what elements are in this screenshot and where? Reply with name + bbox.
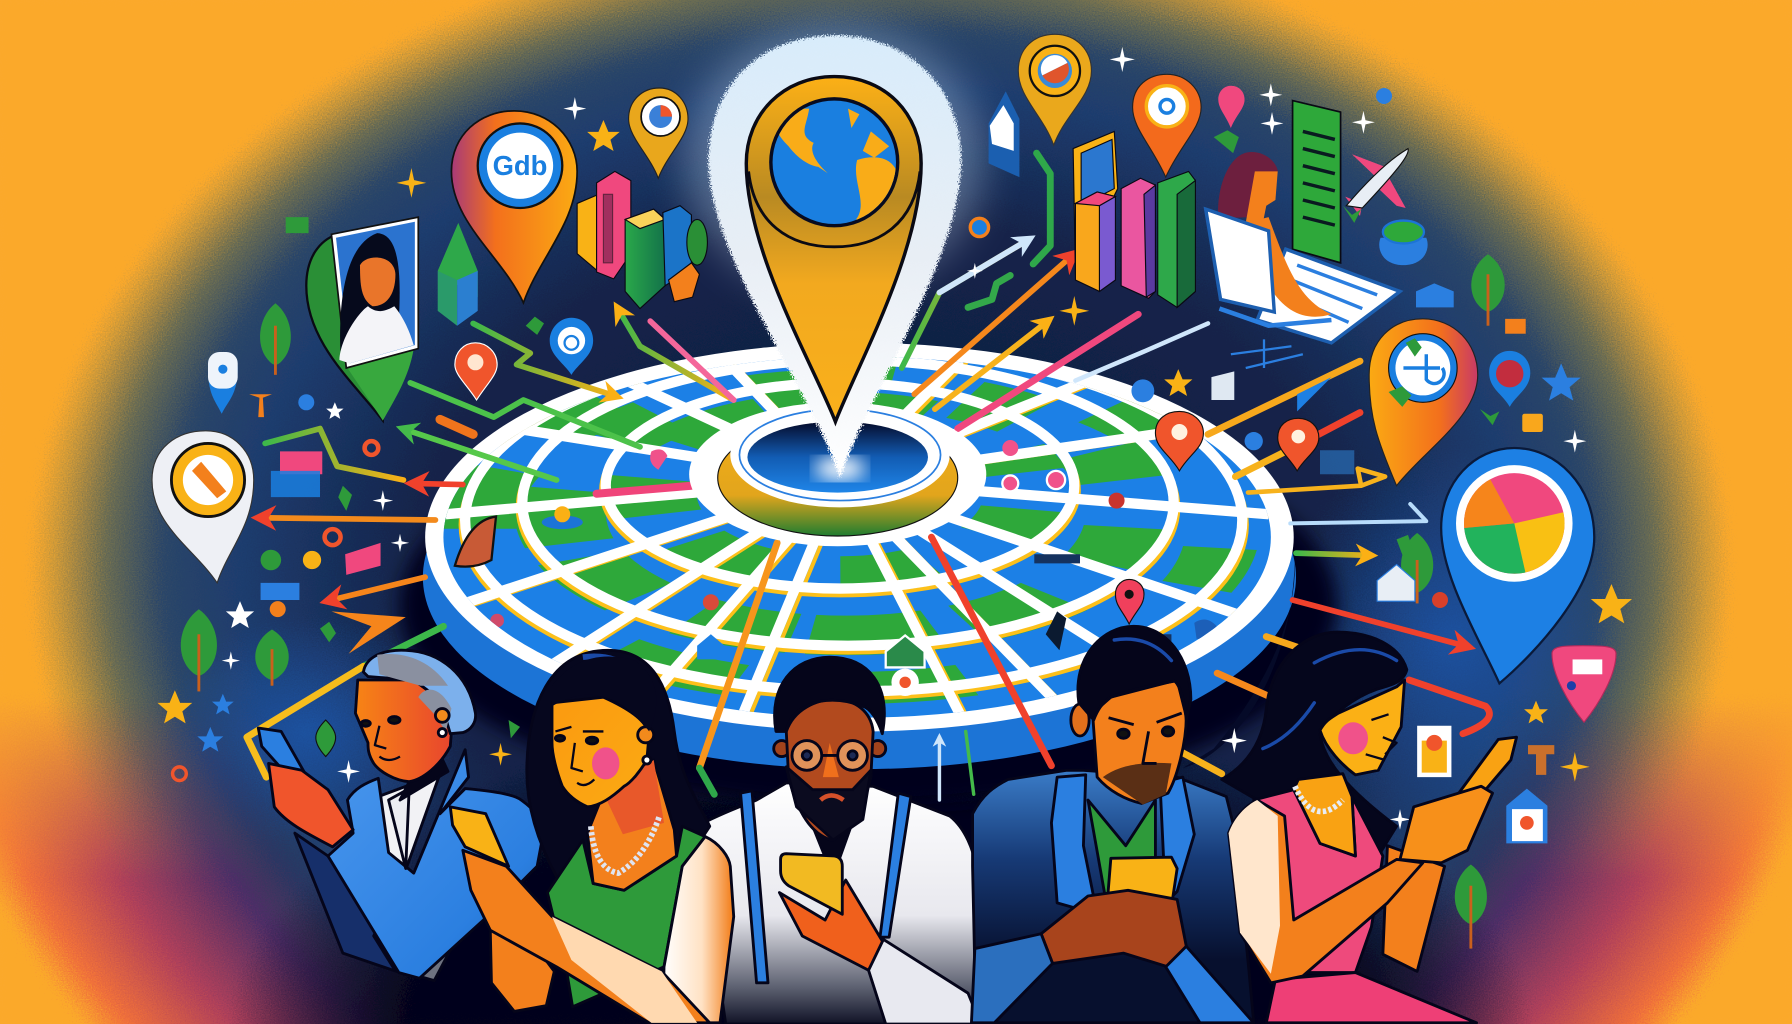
neck and chest <box>587 760 677 890</box>
glasses <box>792 741 867 770</box>
trees <box>181 254 1505 949</box>
buildings cluster top right <box>1073 131 1195 307</box>
arrow group: upper left <box>258 323 640 601</box>
face <box>1093 680 1186 803</box>
hand <box>779 880 883 970</box>
arrows radiating out over the map <box>247 153 1489 800</box>
forearm behind <box>1383 846 1445 971</box>
necklace <box>591 816 659 873</box>
phone: yellow <box>1441 737 1517 821</box>
small scattered icons: stars, sparkles, dots <box>157 47 1632 843</box>
person 5: woman in pink dress with yellow phone <box>1222 632 1517 1023</box>
pin: white with gold ring left <box>152 431 254 583</box>
hands <box>1041 890 1186 967</box>
pin: small white-blue far left <box>208 352 238 414</box>
map small landmarks <box>455 440 1219 696</box>
pin: green with portrait photo <box>306 217 418 421</box>
phone: yellow <box>450 807 509 866</box>
blue house top <box>989 91 1019 177</box>
person 2: woman in green top with yellow phone <box>450 650 734 1023</box>
arm <box>1229 800 1423 983</box>
upper arm <box>663 837 734 1023</box>
pin: small blue-white <box>550 318 593 375</box>
pin: small pink <box>1218 86 1245 128</box>
face <box>774 741 790 757</box>
face <box>1320 680 1405 775</box>
gold pin <box>746 77 921 422</box>
phone: yellow <box>781 854 842 914</box>
arrow group: map front <box>699 537 1051 800</box>
hand <box>1400 786 1493 863</box>
phone: blue <box>258 728 310 782</box>
arrow group: lower right <box>1177 600 1489 774</box>
right sleeve <box>1166 946 1254 1023</box>
dress <box>1254 790 1383 973</box>
pin: orange top right with eye logo <box>1133 74 1201 177</box>
pin: large orange right <box>1369 319 1478 486</box>
pie chart <box>1464 473 1565 574</box>
airplane icon <box>1345 149 1408 216</box>
jar icon <box>1379 221 1428 265</box>
phone: yellow <box>1106 857 1177 914</box>
buildings cluster top left <box>577 171 707 309</box>
pin: small maroon right <box>1489 351 1530 407</box>
pin: orange with logo <box>451 111 577 303</box>
green top <box>547 826 705 1007</box>
pin: small gold top left <box>629 88 688 178</box>
green roof tower left <box>438 223 478 326</box>
hand <box>269 763 353 847</box>
sleeve <box>869 939 981 1024</box>
arrow: long gold line to first phone <box>247 626 443 777</box>
map green blocks <box>480 368 1223 688</box>
pin: big blue with pie chart <box>1441 448 1594 683</box>
arrow group: upper right <box>914 254 1426 555</box>
pins: red on map right <box>1115 411 1319 624</box>
big central location pin with globe <box>686 29 986 546</box>
hub: gold ring base <box>689 402 986 546</box>
map disc: circular city street map <box>400 343 1337 806</box>
map yellow side streets <box>453 351 1275 717</box>
pin: orange with logo: Gdb <box>493 150 547 181</box>
map white roads <box>446 349 1269 714</box>
person 1: older man in blue jacket looking at phone <box>258 650 544 981</box>
person 4: man in blue suit with yellow phone <box>971 626 1254 1023</box>
white pin <box>709 35 961 478</box>
pin: gold top right <box>1018 34 1091 145</box>
woman on laptop icon <box>1206 152 1400 368</box>
pin: small red left <box>455 343 497 400</box>
forearm and hand <box>463 850 710 1023</box>
skirt <box>1266 973 1477 1023</box>
tall green building with lines <box>1293 101 1341 263</box>
arrow group: top centre <box>597 153 1050 494</box>
pin: pink shield right <box>1552 646 1616 722</box>
globe <box>769 97 899 227</box>
face <box>552 697 649 807</box>
portrait woman <box>339 233 414 363</box>
person 3: man with glasses, beard and white shirt <box>697 657 985 1024</box>
